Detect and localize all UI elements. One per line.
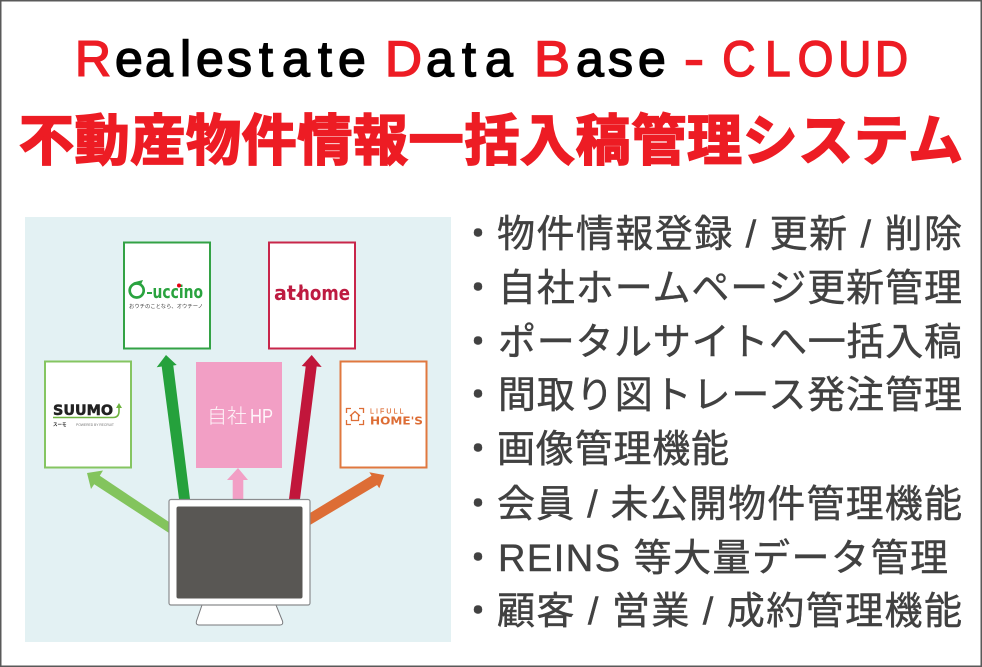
title: Realestate Data Base - CLOUD: - — [684, 31, 704, 87]
list item 2: 自社ホームページ更新管理 — [498, 268, 962, 310]
title: Realestate Data Base - CLOUD: ata — [426, 31, 513, 87]
list item 5: ・ — [459, 429, 497, 471]
box: own homepage: HP — [250, 406, 273, 428]
list item 6: 会員 / 未公開物件管理機能 — [497, 484, 962, 526]
box: own homepage — [196, 362, 282, 468]
feature list — [459, 214, 962, 633]
box: O-uccino logo — [124, 242, 210, 348]
list item 6: ・ — [459, 484, 497, 526]
arrow: to own homepage — [227, 468, 248, 499]
list item 1: ・ — [459, 214, 497, 256]
list item 8: ・ — [459, 591, 497, 633]
box: own homepage: 自社 — [207, 405, 247, 428]
box: at home logo — [269, 242, 355, 348]
heading: Japanese system name: 不動産物件情報一括入稿管理システム — [19, 110, 963, 172]
list item 2: ・ — [459, 268, 497, 310]
list item 4: 間取り図トレース発注管理 — [498, 375, 962, 417]
title: Realestate Data Base - CLOUD: CLOUD — [722, 32, 908, 87]
box: at home logo: at — [274, 281, 296, 305]
box: SUUMO logo: スーモ — [53, 422, 67, 428]
list item 5: 画像管理機能 — [497, 429, 729, 471]
list item 8: 顧客 / 営業 / 成約管理機能 — [497, 591, 962, 633]
title: Realestate Data Base - CLOUD: ase — [576, 31, 666, 87]
icon: monitor — [169, 500, 310, 625]
box: LIFULL HOME'S logo: HOME'S — [370, 416, 423, 428]
title: Realestate Data Base - CLOUD — [75, 31, 908, 87]
box: LIFULL HOME'S logo — [340, 362, 426, 468]
arrow: to LIFULL HOME'S — [310, 472, 384, 525]
list item 1: 物件情報登録 / 更新 / 削除 — [497, 214, 962, 256]
panel: portal publishing diagram — [25, 217, 451, 642]
list item 7: REINS 等大量データ管理 — [498, 538, 948, 580]
arrow: to at home — [289, 355, 322, 499]
box: at home logo: home — [298, 281, 350, 305]
list item 3: ポータルサイトへ一括入稿 — [498, 322, 962, 364]
list item 4: ・ — [459, 375, 497, 417]
arrow: to O-uccino — [157, 355, 190, 499]
title: Realestate Data Base - CLOUD: B — [534, 31, 570, 87]
title: Realestate Data Base - CLOUD: R — [75, 31, 111, 87]
title: Realestate Data Base - CLOUD: D — [385, 31, 422, 87]
list item 7: ・ — [459, 538, 497, 580]
box: SUUMO logo — [45, 362, 131, 468]
box: O-uccino logo: おウチのことなら、オウチーノ — [129, 302, 203, 310]
box: SUUMO logo: SUUMO — [53, 403, 113, 419]
box: LIFULL HOME'S logo: LIFULL — [370, 408, 404, 416]
box: SUUMO logo: POWERED BY RECRUIT — [76, 423, 114, 427]
title: Realestate Data Base - CLOUD: ealestate — [115, 31, 366, 87]
box: O-uccino logo: uccino — [152, 282, 203, 303]
list item 3: ・ — [459, 322, 497, 364]
arrow: to SUUMO — [87, 470, 169, 533]
